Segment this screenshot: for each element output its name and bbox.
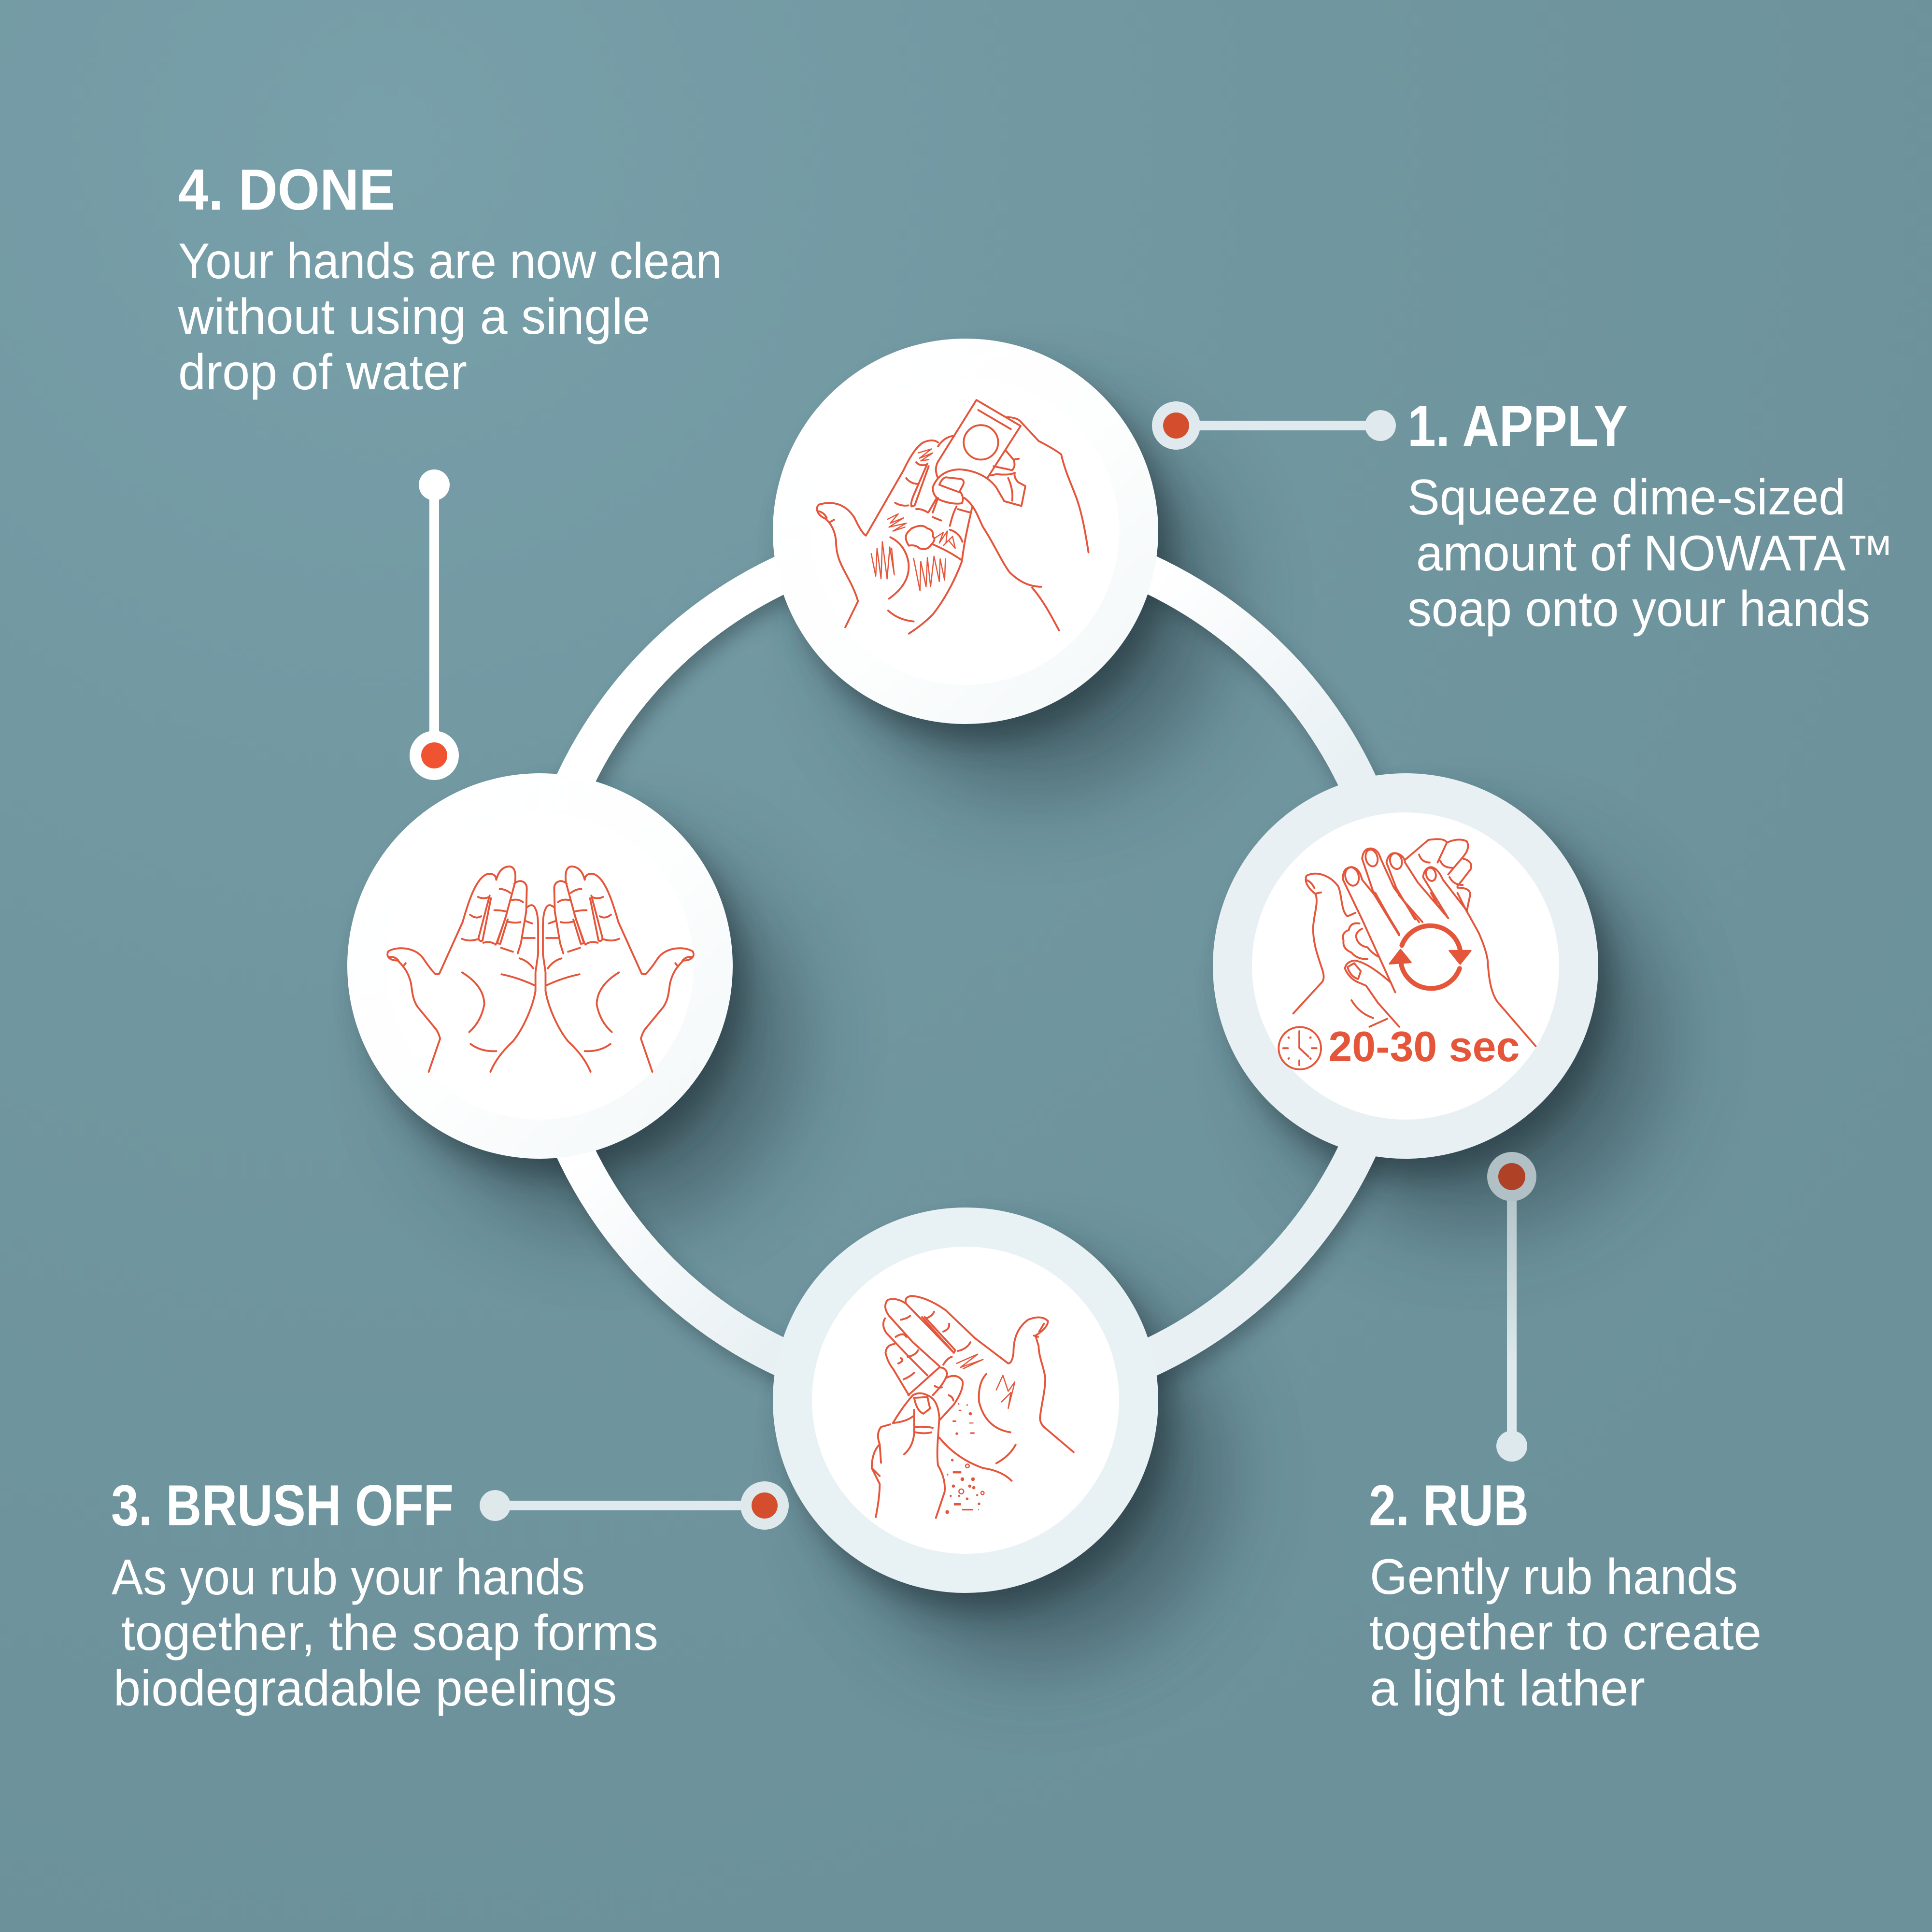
- description: step 2: together to create: [1369, 1605, 1762, 1661]
- description: step 1: Squeeze dime-sized: [1407, 469, 1846, 526]
- connector: step 2: [1487, 1152, 1536, 1462]
- icon: left hand: [387, 867, 538, 1072]
- description: step 4: without using a single: [178, 289, 650, 345]
- description: step 4: Your hands are now clean: [178, 233, 722, 289]
- description: step 1: soap onto your hands: [1407, 581, 1870, 637]
- description: step 2: a light lather: [1370, 1661, 1645, 1717]
- text: step 1 apply: [1407, 394, 1894, 637]
- description: step 2: [1369, 1549, 1762, 1717]
- description: step 1: amount of NOWATA™: [1416, 526, 1894, 582]
- icon: clock: [1279, 1027, 1321, 1069]
- connecting ring: [533, 533, 1399, 1399]
- description: step 1: [1407, 469, 1894, 637]
- panel: step 2 rub circle: [1213, 773, 1598, 1159]
- heading: 3. BRUSH OFF: 3. BRUSH OFF: [111, 1473, 454, 1538]
- description: step 4: [178, 233, 722, 400]
- text: step 4 done: [178, 157, 722, 400]
- text: step 2 rub: [1369, 1473, 1762, 1717]
- icon: circular rub arrows: [1390, 926, 1471, 988]
- connector: step 3: [480, 1481, 789, 1530]
- heading: 2. RUB: 2. RUB: [1369, 1473, 1529, 1538]
- description: step 3: As you rub your hands: [112, 1549, 585, 1605]
- timer label: 20-30 sec: [1328, 1023, 1520, 1070]
- icon: soap peelings particles: [945, 1403, 980, 1514]
- panel: step 4 done circle: [347, 773, 733, 1159]
- icon: brushing off peelings: [872, 1296, 1074, 1518]
- icon: clean open hands: [387, 867, 694, 1072]
- icon: rubbing hands with timer: [1279, 839, 1535, 1070]
- panel: step 3 brush off circle: [773, 1208, 1158, 1593]
- connector: step 4: [410, 469, 459, 780]
- description: step 3: biodegradable peelings: [114, 1661, 617, 1717]
- description: step 3: [112, 1549, 658, 1717]
- text: step 3 brush off: [111, 1473, 658, 1717]
- heading: 4. DONE: 4. DONE: [178, 157, 395, 222]
- heading: 1. APPLY: 1. APPLY: [1407, 394, 1628, 458]
- icon: right hand: [543, 867, 694, 1072]
- description: step 2: Gently rub hands: [1370, 1549, 1738, 1605]
- panel: step 1 apply circle: [773, 339, 1158, 724]
- description: step 4: drop of water: [178, 344, 467, 400]
- description: step 3: together, the soap forms: [121, 1605, 658, 1661]
- connector: step 1: [1152, 401, 1396, 450]
- icon: hands applying soap from tube: [817, 400, 1089, 634]
